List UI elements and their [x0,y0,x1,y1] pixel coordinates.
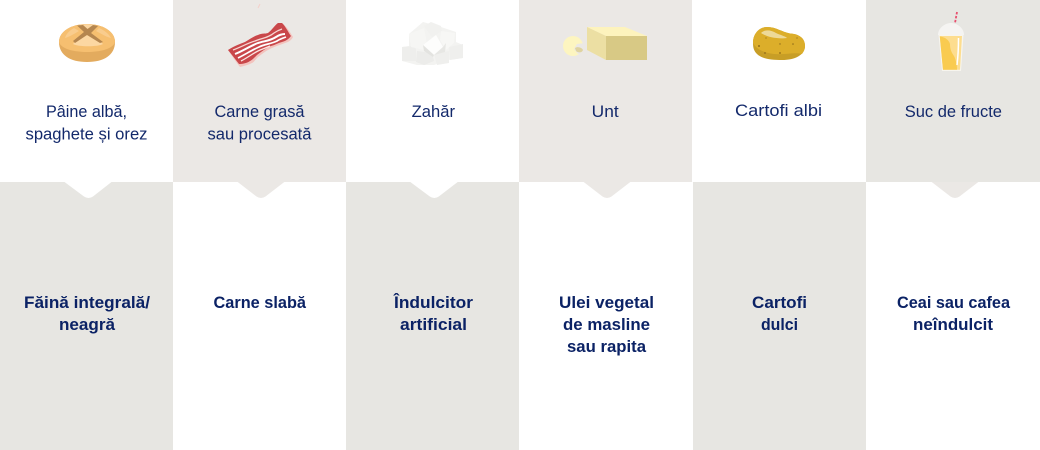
icon: sugar cubes [402,22,463,65]
panel: white bread column [24,24,150,334]
text: fatty meat label [208,103,312,144]
text: white bread label: Pâine albă, [46,103,127,121]
text: white bread label [26,103,148,144]
icon: potato [753,27,805,60]
text: white bread label: spaghete și orez [26,126,148,144]
panel: fatty meat column [208,4,312,312]
text: white potatoes label: Cartofi albi [735,102,822,120]
notch: grey pointer [584,182,630,198]
text: artificial sweetener: Îndulcitor [393,293,474,312]
text: fatty meat label: sau procesată [208,126,312,144]
text: whole wheat flour: Făină integrală/ [24,294,150,312]
text: butter label: Unt [592,103,619,121]
notch: white pointer [410,182,458,198]
icon: juice cup [938,12,964,71]
notch: grey pointer [238,182,284,198]
icon: bread [59,24,115,62]
text: unsweetened tea or coffee: neîndulcit [913,316,994,334]
notch: grey pointer [932,182,978,198]
text: vegetable oil: de masline [563,316,650,334]
text: artificial sweetener [393,293,474,334]
panel: sugar column [393,22,474,334]
text: vegetable oil: sau rapita [567,338,647,356]
text: fruit juice label: Suc de fructe [905,103,1002,121]
text: sugar label: Zahăr [412,103,456,121]
panel: fruit juice column [897,12,1011,334]
text: sweet potatoes: Cartofi [752,294,807,312]
text: vegetable oil [559,294,654,356]
text: artificial sweetener: artificial [400,316,467,334]
text: sweet potatoes: dulci [761,316,798,334]
text: unsweetened tea or coffee [897,294,1011,334]
text: whole wheat flour [24,294,150,334]
text: unsweetened tea or coffee: Ceai sau cafea [897,294,1011,312]
panel: potato column [735,27,822,334]
text: lean meat: Carne slabă [214,294,307,312]
text: whole wheat flour: neagră [59,316,116,334]
icon: bacon [228,4,293,67]
text: sweet potatoes [752,294,807,334]
text: vegetable oil: Ulei vegetal [559,294,654,312]
icon: butter [563,27,647,60]
text: fatty meat label: Carne grasă [214,103,305,121]
panel: butter column [559,27,654,356]
notch: white pointer [64,182,112,198]
